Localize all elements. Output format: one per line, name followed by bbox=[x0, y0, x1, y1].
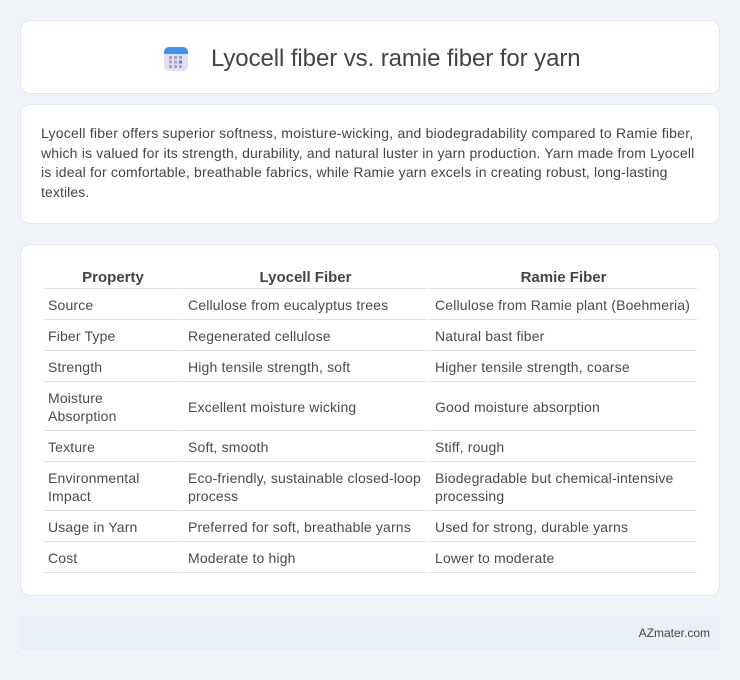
comparison table: Regenerated cellulose bbox=[188, 328, 331, 344]
summary text: Lyocell fiber offers superior softness, moisture-wicking, and biodegradability compared to Ramie fiber, bbox=[41, 125, 693, 141]
header: property: Property bbox=[82, 269, 144, 286]
summary text: which is valued for its strength, durability, and natural luster in yarn production. Yarn made from Lyocell bbox=[41, 145, 694, 161]
comparison table: Preferred for soft, breathable yarns bbox=[188, 519, 411, 535]
row: environmental impact bbox=[48, 470, 140, 504]
summary text: textiles. bbox=[41, 184, 89, 200]
comparison table: Stiff, rough bbox=[435, 439, 504, 455]
comparison table: High tensile strength, soft bbox=[188, 359, 350, 375]
comparison table: processing bbox=[435, 488, 504, 504]
row: usage in yarn: Usage in Yarn bbox=[48, 519, 138, 535]
comparison table: Soft, smooth bbox=[188, 439, 269, 455]
comparison table: Excellent moisture wicking bbox=[188, 399, 356, 415]
footer credit: AZmater.com bbox=[639, 626, 710, 640]
row: moisture absorption: Absorption bbox=[48, 408, 117, 424]
comparison table: process bbox=[188, 488, 238, 504]
row: cost: Cost bbox=[48, 550, 77, 566]
comparison table: Natural bast fiber bbox=[435, 328, 544, 344]
row: moisture absorption bbox=[48, 390, 117, 424]
row: strength: Strength bbox=[48, 359, 102, 375]
summary panel bbox=[20, 104, 720, 224]
header: lyocell: Lyocell Fiber bbox=[260, 269, 351, 286]
comparison table: Cellulose from eucalyptus trees bbox=[188, 297, 388, 313]
table panel bbox=[20, 244, 720, 596]
comparison table: Eco-friendly, sustainable closed-loop bbox=[188, 470, 421, 486]
footer bar bbox=[20, 616, 720, 650]
summary text: is ideal for comfortable, breathable fabrics, while Ramie yarn excels in creating robust, long-lasting bbox=[41, 164, 668, 180]
comparison table: Higher tensile strength, coarse bbox=[435, 359, 630, 375]
summary text bbox=[41, 125, 694, 200]
row: source: Source bbox=[48, 297, 93, 313]
comparison table: Moderate to high bbox=[188, 550, 296, 566]
header: ramie: Ramie Fiber bbox=[521, 269, 606, 286]
row: environmental impact: Environmental bbox=[48, 470, 140, 486]
icon: calendar bbox=[164, 47, 188, 71]
comparison table: Biodegradable but chemical-intensive bbox=[435, 470, 673, 486]
row: texture: Texture bbox=[48, 439, 95, 455]
comparison table: Used for strong, durable yarns bbox=[435, 519, 628, 535]
comparison table bbox=[44, 269, 697, 573]
title: Lyocell fiber vs. ramie fiber for yarn bbox=[211, 45, 581, 72]
comparison table: Cellulose from Ramie plant (Boehmeria) bbox=[435, 297, 690, 313]
row: environmental impact: Impact bbox=[48, 488, 91, 504]
row: moisture absorption: Moisture bbox=[48, 390, 103, 406]
comparison table: Good moisture absorption bbox=[435, 399, 600, 415]
title panel bbox=[20, 20, 720, 94]
row: fiber type: Fiber Type bbox=[48, 328, 116, 344]
comparison table: Lower to moderate bbox=[435, 550, 554, 566]
